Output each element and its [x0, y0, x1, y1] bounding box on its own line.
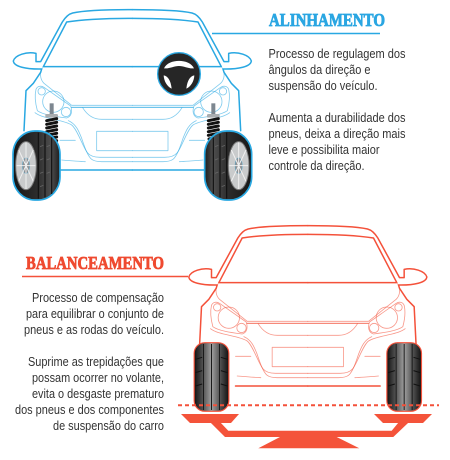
car illustration: balanceamento: [189, 226, 427, 411]
level line: [178, 404, 439, 406]
text: definition of alinhamento: [268, 46, 406, 93]
left suspension: [45, 103, 58, 143]
right front tyre: [387, 343, 421, 411]
title: balanceamento: BALANCEAMENTO: [26, 253, 164, 273]
left front tyre: [194, 343, 229, 411]
left platform: [181, 414, 239, 423]
text: benefits of balanceamento: de suspensão do carro: [53, 418, 164, 433]
scale base: [211, 423, 408, 448]
leader line: balanceamento: [22, 276, 188, 278]
text: definition of alinhamento: Processo de regulagem dos: [268, 46, 406, 61]
left front tyre: [13, 131, 60, 200]
text: definition of alinhamento: ângulos da direção e: [268, 62, 370, 77]
balancing machine: [178, 405, 439, 448]
text: benefits of alinhamento: Aumenta a durabilidade dos: [268, 110, 406, 125]
car illustration: alinhamento: [13, 10, 252, 200]
right platform: [374, 414, 432, 423]
text: benefits of balanceamento: dos pneus e dos componentes: [15, 402, 164, 417]
right suspension: [207, 103, 220, 143]
text: definition of balanceamento: [24, 290, 164, 337]
leader line: alinhamento: [212, 32, 380, 34]
title: alinhamento: ALINHAMENTO: [269, 10, 385, 30]
text: definition of balanceamento: para equilibrar o conjunto de: [26, 306, 164, 321]
text: definition of alinhamento: suspensão do veículo.: [268, 78, 378, 93]
steering wheel: [158, 53, 200, 95]
car outline: [189, 226, 427, 386]
text: benefits of alinhamento: leve e possibilita maior: [268, 142, 380, 157]
text: benefits of balanceamento: evita o desgaste prematuro: [32, 386, 164, 401]
car outline: [13, 10, 251, 170]
text: benefits of balanceamento: possam ocorrer no volante,: [32, 370, 164, 385]
text: definition of balanceamento: Processo de compensação: [32, 290, 164, 305]
text: benefits of alinhamento: pneus, deixa a direção mais: [268, 126, 406, 141]
text: benefits of balanceamento: Suprime as trepidações que: [28, 354, 164, 369]
text: definition of balanceamento: pneus e as rodas do veículo.: [24, 322, 164, 337]
text: benefits of alinhamento: [268, 110, 406, 173]
text: benefits of balanceamento: [15, 354, 164, 433]
right front tyre: [205, 131, 252, 200]
text: benefits of alinhamento: controle da direção.: [268, 158, 364, 173]
